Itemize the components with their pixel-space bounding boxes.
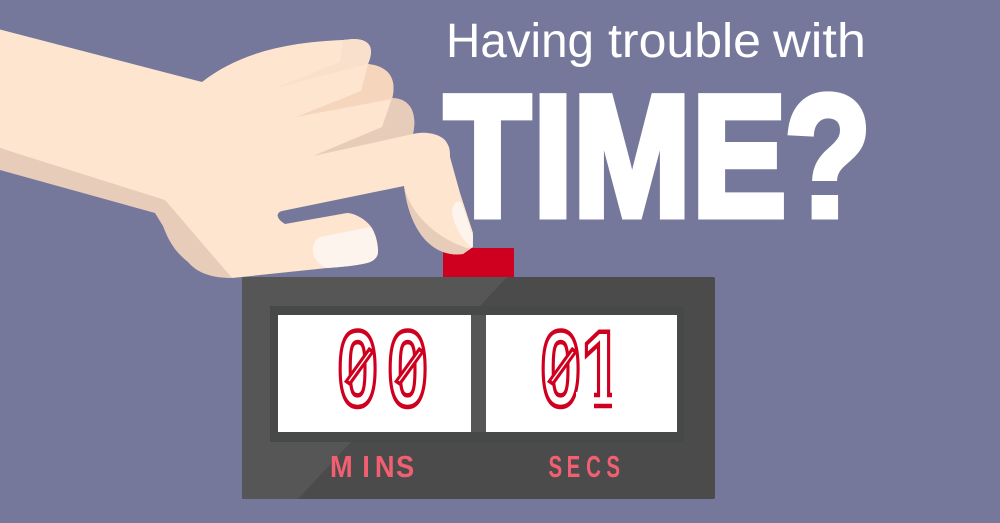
heading line: Having trouble with: with <box>772 15 866 68</box>
seconds panel <box>486 315 677 432</box>
display frame <box>270 306 684 442</box>
hand main shape <box>0 30 473 278</box>
fingertip shade <box>404 186 470 254</box>
arm and wrist shadow <box>0 148 232 278</box>
fingernail <box>452 202 473 248</box>
knuckle shade 3 <box>313 98 414 156</box>
knuckle shade 1 <box>275 39 371 88</box>
timer device <box>242 277 715 499</box>
device light facet <box>242 277 507 499</box>
centre divider <box>471 315 486 432</box>
minutes digits: 00 <box>337 308 428 429</box>
red timer button <box>443 248 514 277</box>
hand pressing button <box>0 30 473 278</box>
minutes panel <box>278 315 471 432</box>
thumbnail <box>313 227 378 268</box>
heading line: Having trouble with: trouble <box>608 15 761 68</box>
MINS label: MINS <box>330 450 414 484</box>
heading line: Having trouble with: Having <box>446 15 594 68</box>
seconds digits: 01 <box>540 308 622 429</box>
heading word: TIME?: TIME? <box>444 61 871 253</box>
device body <box>242 277 715 499</box>
knuckle shade 2 <box>296 64 393 117</box>
SECS label: SECS <box>548 449 620 484</box>
